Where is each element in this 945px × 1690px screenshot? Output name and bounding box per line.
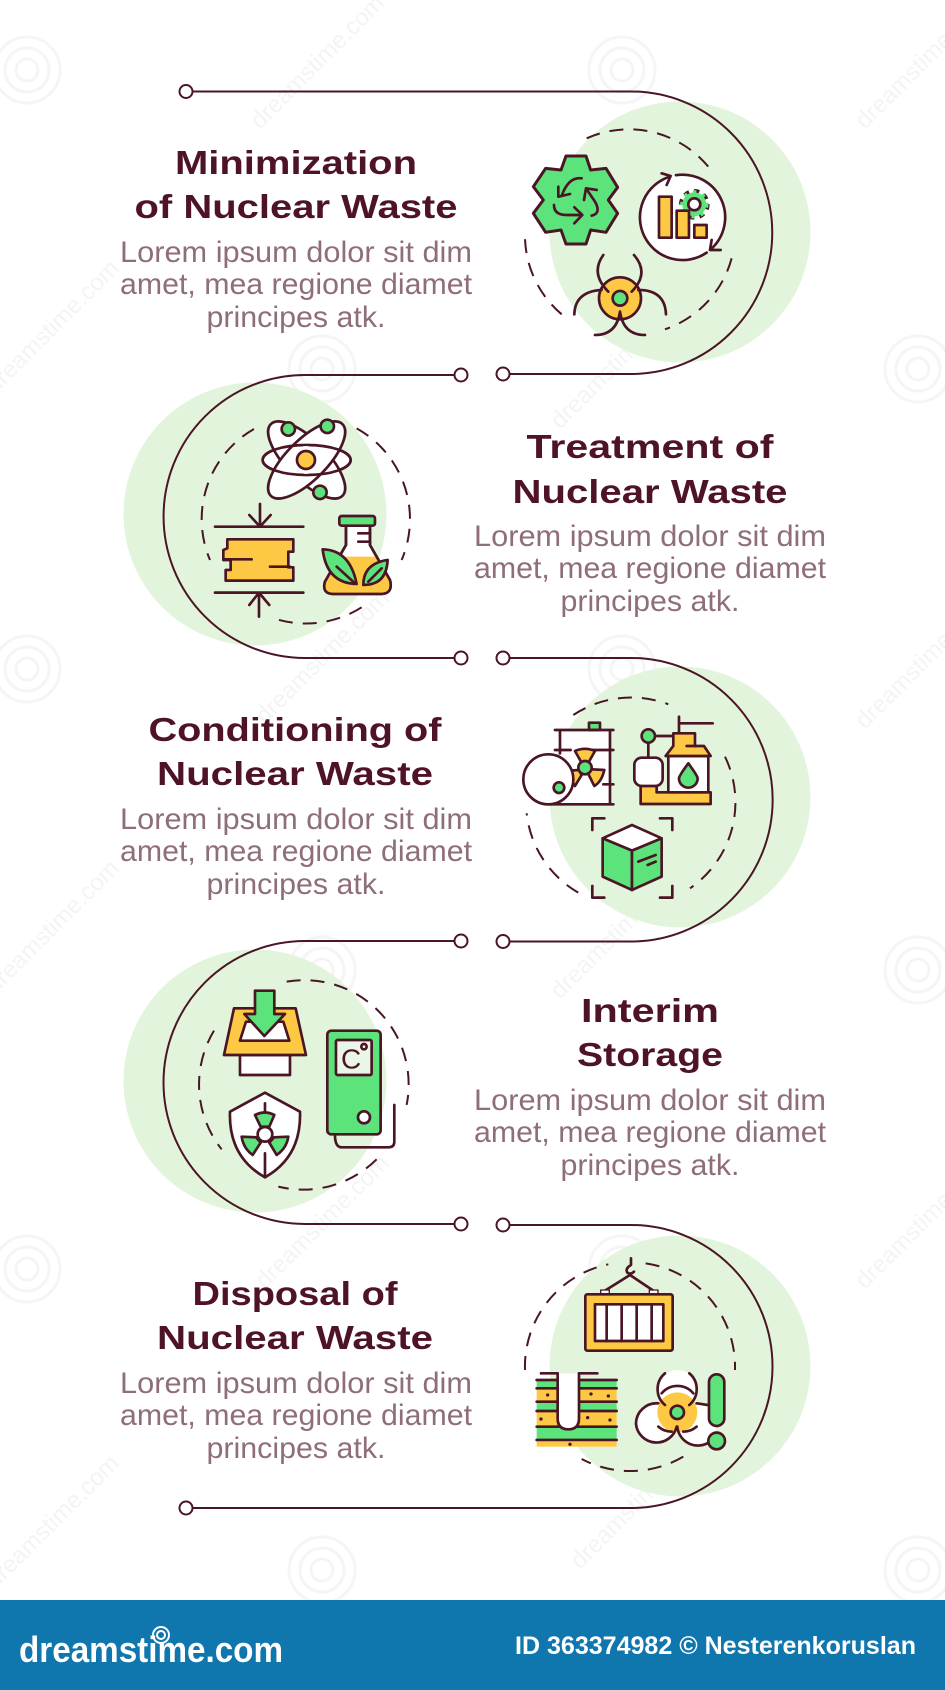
text block: conditioning description: amet, mea regione diamet	[120, 835, 473, 868]
stock photo watermark pattern: dreamstime.com	[250, 1150, 395, 1294]
background circle: step 4	[124, 950, 386, 1212]
icon: gear with recycle arrows	[533, 156, 618, 244]
text block: disposal description: principes atk.	[206, 1432, 386, 1465]
text block: minimization description: Lorem ipsum dolor sit dim	[120, 236, 472, 269]
dashed ring	[525, 1263, 735, 1471]
panel: treatment of nuclear waste	[202, 410, 827, 624]
icon group: interim storage	[199, 980, 409, 1190]
background circle: step 2	[124, 382, 386, 646]
text block: treatment description: principes atk.	[560, 585, 740, 618]
connector line: step 1	[180, 85, 772, 380]
icon group: conditioning	[523, 697, 735, 898]
stock photo watermark pattern: dreamstime.com	[545, 860, 690, 1004]
text block: conditioning description: Lorem ipsum dolor sit dim	[120, 803, 472, 836]
background circle: step 5	[550, 1236, 810, 1496]
heading: disposal: Disposal of	[192, 1275, 399, 1312]
text block: minimization description: amet, mea regione diamet	[120, 268, 473, 301]
stock photo watermark pattern: dreamstime.com	[250, 585, 395, 729]
background circle: step 1	[550, 102, 810, 362]
heading: treatment: Treatment of	[526, 428, 775, 465]
footer bar	[0, 1600, 945, 1690]
icon: cube in frame	[592, 818, 672, 898]
text block: treatment description	[474, 520, 827, 618]
text block: storage description: principes atk.	[560, 1149, 740, 1182]
panel: disposal of nuclear waste	[120, 1258, 735, 1471]
text block: storage description: Lorem ipsum dolor sit dim	[474, 1084, 826, 1117]
heading: interim storage: Storage	[577, 1036, 723, 1073]
icon: atom	[257, 410, 357, 510]
text block: disposal description: amet, mea regione diamet	[120, 1399, 473, 1432]
dashed ring	[527, 697, 735, 893]
icon: temperature device	[327, 1031, 394, 1147]
icon: radiation shield	[230, 1093, 300, 1177]
heading: minimization	[134, 144, 458, 225]
image id and credit: ID 363374982 © Nesterenkoruslan	[515, 1632, 916, 1660]
heading: minimization: of Nuclear Waste	[134, 188, 458, 225]
icon group: disposal	[525, 1258, 735, 1471]
connector line: step 5	[180, 1218, 772, 1514]
icon: storage box with arrow	[224, 991, 306, 1075]
panel: conditioning of nuclear waste	[120, 697, 735, 901]
text block: disposal description: Lorem ipsum dolor sit dim	[120, 1367, 472, 1400]
logo text: dreamstime.com	[19, 1629, 283, 1670]
connector line: step 3	[496, 652, 773, 948]
heading: minimization: Minimization	[175, 144, 417, 181]
text block: treatment description: amet, mea regione diamet	[474, 552, 827, 585]
icon: hanging container	[585, 1258, 673, 1351]
icon: logo spiral	[153, 1627, 169, 1643]
heading: treatment	[512, 428, 788, 510]
text block: minimization description: principes atk.	[206, 301, 386, 334]
icon: chart in cycle arrows	[640, 173, 725, 260]
icon: radioactive barrel	[523, 723, 613, 804]
icon: biohazard warning	[636, 1370, 725, 1449]
text block: disposal description	[120, 1367, 473, 1465]
heading: interim storage: Interim	[581, 992, 719, 1029]
icon group: minimization	[525, 129, 732, 335]
icon: processing machine with drop	[634, 717, 713, 804]
text block: conditioning description	[120, 803, 473, 901]
text block: storage description	[474, 1084, 827, 1182]
stock photo watermark pattern: dreamstime.com	[545, 290, 690, 434]
text block: treatment description: Lorem ipsum dolor sit dim	[474, 520, 826, 553]
heading: disposal	[157, 1275, 433, 1356]
dashed ring	[525, 129, 732, 329]
icon: temperature device: C	[341, 1043, 361, 1074]
heading: conditioning	[148, 711, 443, 792]
heading: treatment: Nuclear Waste	[512, 473, 788, 510]
text block: storage description: amet, mea regione diamet	[474, 1116, 827, 1149]
icon: flask with leaves	[323, 516, 391, 594]
icon group: treatment	[202, 410, 410, 624]
icon: biohazard	[574, 255, 666, 335]
panel: interim storage	[199, 980, 827, 1190]
connector line: step 2	[164, 368, 468, 664]
dashed ring	[202, 428, 410, 624]
text block: minimization description	[120, 236, 473, 334]
text block: conditioning description: principes atk.	[206, 868, 386, 901]
heading: interim storage	[577, 992, 723, 1073]
heading: disposal: Nuclear Waste	[157, 1319, 433, 1356]
heading: conditioning: Conditioning of	[148, 711, 443, 748]
icon: compression block	[215, 504, 303, 617]
stock photo watermark pattern: dreamstime.com	[565, 1430, 710, 1574]
connector line: step 4	[164, 934, 468, 1230]
dashed ring	[199, 980, 409, 1190]
heading: conditioning: Nuclear Waste	[157, 755, 433, 792]
background circle: step 3	[550, 666, 810, 928]
icon: underground repository	[537, 1373, 617, 1447]
panel: minimization of nuclear waste	[120, 129, 732, 335]
